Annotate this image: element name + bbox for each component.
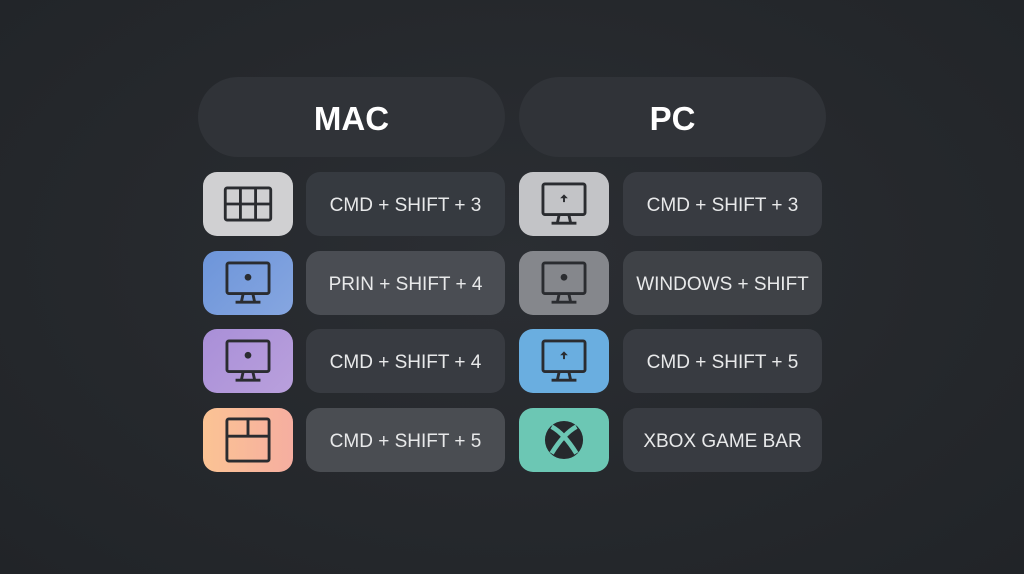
pc row 1 icon: monitor upload [519, 172, 609, 236]
pc row 3 text [623, 329, 822, 393]
mac row 2 text [306, 251, 505, 315]
mac row 2 icon: monitor [203, 251, 293, 315]
pc row 3 icon: monitor upload [519, 329, 609, 393]
mac row 4 icon: window layout [203, 408, 293, 472]
pc row 4 icon: xbox [519, 408, 609, 472]
header: MAC [198, 77, 505, 157]
pc row 1 text [623, 172, 822, 236]
mac row 4 text [306, 408, 505, 472]
mac row 2 text: PRIN + SHIFT + 4 [329, 274, 482, 295]
pc row 4 text: XBOX GAME BAR [643, 431, 802, 452]
header: MAC: MAC [314, 100, 389, 136]
pc row 2 text [623, 251, 822, 315]
mac row 3 text [306, 329, 505, 393]
pc row 2 icon: monitor [519, 251, 609, 315]
pc row 4 text [623, 408, 822, 472]
mac row 1 icon: grid [203, 172, 293, 236]
mac row 4 text: CMD + SHIFT + 5 [330, 431, 481, 452]
pc row 3 text: CMD + SHIFT + 5 [647, 352, 798, 373]
mac row 3 icon: monitor [203, 329, 293, 393]
mac row 1 text [306, 172, 505, 236]
header: PC [519, 77, 826, 157]
pc row 1 text: CMD + SHIFT + 3 [647, 195, 798, 216]
mac row 1 text: CMD + SHIFT + 3 [330, 195, 481, 216]
mac row 3 text: CMD + SHIFT + 4 [330, 352, 481, 373]
header: PC: PC [650, 100, 695, 136]
pc row 2 text: WINDOWS + SHIFT [636, 274, 809, 295]
